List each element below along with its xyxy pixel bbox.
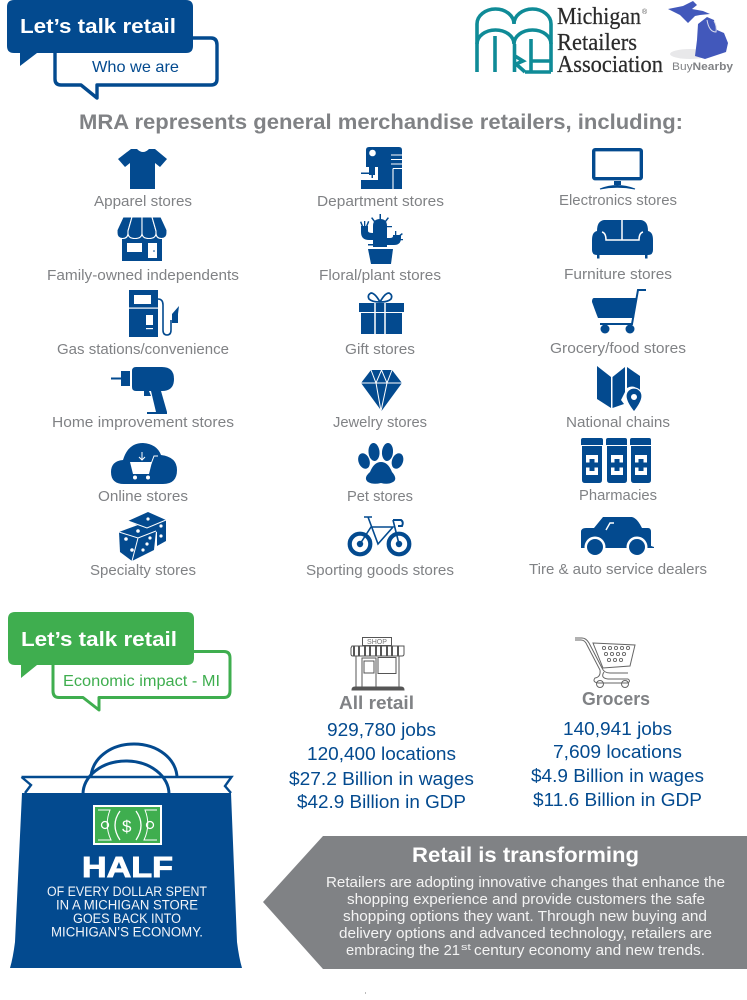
body text: st [461, 942, 472, 952]
speech bubbles: Let's talk retail / Who we are: Let’s talk retail [20, 15, 176, 38]
text: half: HALF [82, 852, 173, 884]
icon: pill bottles [581, 438, 651, 483]
store: home improvement [52, 367, 234, 431]
label: furniture: Furniture stores [564, 266, 672, 283]
icon: cart outline [575, 638, 635, 688]
icon: dice [119, 512, 166, 561]
stats: all retail [289, 719, 474, 812]
label: apparel: Apparel stores [94, 193, 192, 210]
body text: century economy and new trends. [474, 943, 705, 959]
body text: shopping options they want. Through new buying and [343, 909, 707, 925]
label: specialty: Specialty stores [90, 562, 196, 579]
label: grocery: Grocery/food stores [550, 340, 686, 357]
store: pharmacies [579, 438, 657, 504]
icon: map with pin [597, 366, 642, 412]
stats: grocers: 7,609 locations [553, 741, 682, 762]
icon: dollar bill [94, 806, 161, 844]
label: pharmacies: Pharmacies [579, 487, 657, 504]
icon: paw [356, 443, 405, 484]
store: tire and auto [529, 517, 707, 578]
icon: television [594, 150, 641, 189]
stats: all retail: 929,780 jobs [327, 719, 436, 740]
label: family-owned: Family-owned independents [47, 267, 239, 284]
text: every dollar: MICHIGAN’S ECONOMY. [51, 924, 203, 940]
label: national chains: National chains [566, 414, 670, 431]
logo: BuyNearby Michigan bag [668, 1, 734, 73]
icon: storefront [117, 217, 167, 261]
label: floral: Floral/plant stores [319, 267, 441, 284]
stats: grocers: $11.6 Billion in GDP [533, 789, 702, 810]
stats: all retail: 120,400 locations [307, 743, 456, 764]
stats: grocers: $4.9 Billion in wages [531, 765, 704, 786]
icon: shop outline [351, 638, 404, 690]
store: gas stations [57, 290, 229, 358]
logo: Michigan Retailers Association [477, 3, 663, 78]
icon: t-shirt [118, 149, 167, 189]
logo: BuyNearby Michigan bag: BuyNearby [672, 61, 734, 73]
icon: bicycle [350, 517, 409, 554]
icon: gas pump [129, 290, 179, 337]
label: online: Online stores [98, 488, 188, 505]
logo: Michigan Retailers Association: Association [557, 51, 663, 78]
icon: gift box [359, 293, 404, 334]
stats: grocers [531, 718, 704, 810]
stats: all retail: $42.9 Billion in GDP [297, 791, 466, 812]
icon: shop outline: SHOP [367, 639, 387, 646]
store: apparel [94, 149, 192, 210]
text: every dollar [47, 884, 207, 940]
store: specialty [90, 512, 196, 579]
store: sporting goods [306, 517, 454, 579]
label: gas stations: Gas stations/convenience [57, 341, 229, 358]
store: jewelry [333, 370, 427, 431]
speech bubbles: Let's talk retail / Economic impact [8, 612, 230, 710]
icon: diamond [361, 370, 402, 411]
store: electronics [559, 150, 677, 209]
store: online [98, 443, 188, 505]
icon: sewing machine [361, 147, 402, 189]
icon: sofa [592, 220, 653, 258]
text: every dollar: IN A MICHIGAN STORE [56, 898, 198, 912]
icon: bag handles [83, 744, 177, 794]
panel: shopping bag [10, 744, 242, 968]
logo: Michigan Retailers Association: Michigan [557, 3, 641, 30]
label: jewelry: Jewelry stores [333, 414, 427, 431]
bag rim [22, 777, 232, 793]
label: sporting goods: Sporting goods stores [306, 562, 454, 579]
icon: cactus [360, 214, 403, 264]
heading: grocers: Grocers [582, 688, 650, 709]
store: department [317, 147, 444, 210]
heading: retail is transforming: Retail is transforming [412, 843, 639, 867]
store: floral [319, 214, 441, 284]
logo: Michigan Retailers Association: Retailers [557, 29, 637, 56]
panel: grocers stats [531, 638, 704, 810]
icon: drill [111, 367, 174, 414]
text: every dollar: OF EVERY DOLLAR SPENT [47, 884, 207, 899]
heading: all retail: All retail [339, 692, 414, 713]
speech bubbles: Let's talk retail / Who we are: Who we are [92, 59, 179, 76]
label: electronics: Electronics stores [559, 192, 677, 209]
heading: MRA represents: MRA represents general merchandise retailers, including: [79, 110, 683, 134]
store: gift [345, 293, 415, 358]
body text: delivery options and advanced technology, retailers are [339, 926, 712, 942]
body text: embracing the 21 [346, 943, 460, 959]
panel: retail is transforming [263, 836, 747, 969]
gray arrow background [263, 836, 747, 969]
label: home improvement: Home improvement stores [52, 414, 234, 431]
speech bubbles: Let's talk retail / Who we are [7, 0, 217, 98]
body text [326, 875, 725, 959]
label: department: Department stores [317, 193, 444, 210]
stats: all retail: $27.2 Billion in wages [289, 768, 474, 789]
speech bubbles: Let's talk retail / Economic impact: Let’s talk retail [21, 628, 177, 651]
speech bubbles: Let's talk retail / Economic impact: Economic impact - MI [63, 673, 220, 690]
store: furniture [564, 220, 672, 283]
store: family-owned [47, 217, 239, 284]
icon: shopping cart [592, 290, 646, 334]
icon: dollar bill: $ [122, 817, 132, 836]
panel: all retail stats [289, 638, 474, 812]
label: gift: Gift stores [345, 341, 415, 358]
icon: cloud with cart [111, 443, 177, 484]
store: grocery [550, 290, 686, 357]
stats: grocers: 140,941 jobs [563, 718, 672, 739]
body text: shopping experience and provide customers the safe [347, 892, 705, 908]
logo: Michigan Retailers Association: ® [642, 8, 648, 16]
label: tire and auto: Tire & auto service dealers [529, 561, 707, 578]
store: pet [347, 443, 413, 505]
text: every dollar: GOES BACK INTO [73, 911, 181, 926]
bag body [10, 793, 242, 968]
store: national chains [566, 366, 670, 431]
icon: car [581, 517, 654, 558]
label: pet: Pet stores [347, 488, 413, 505]
body text: Retailers are adopting innovative changes that enhance the [326, 875, 725, 891]
